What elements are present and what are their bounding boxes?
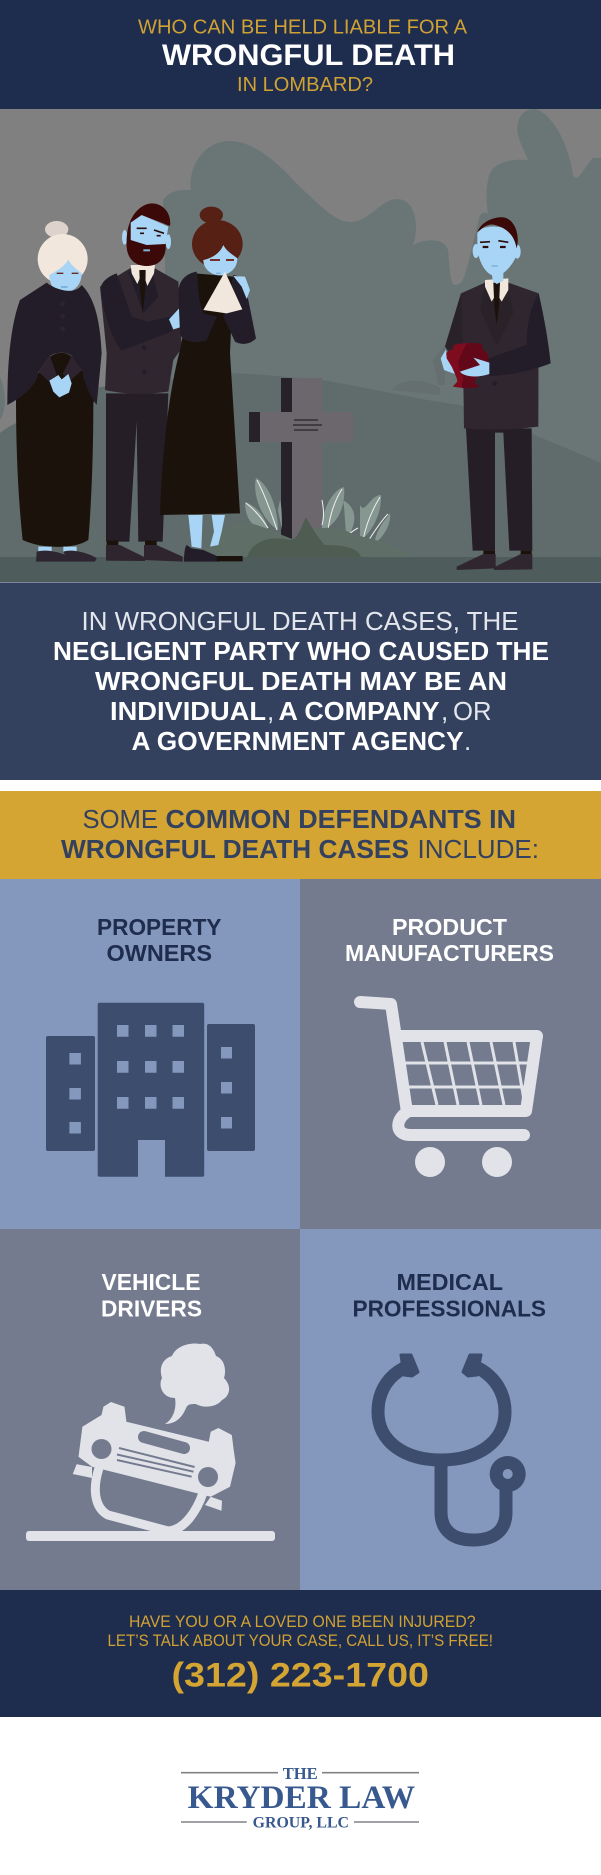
call to action text: HAVE YOU OR A LOVED ONE BEEN INJURED? <box>129 1612 476 1631</box>
panel: call to action <box>0 1590 601 1717</box>
phone number: (312) 223-1700 <box>172 1656 429 1694</box>
figure: man holding urn <box>441 217 551 570</box>
label: MEDICAL <box>396 1269 503 1295</box>
statement text: , <box>267 696 274 726</box>
label: VEHICLE <box>102 1269 200 1295</box>
hill <box>0 373 601 557</box>
illustration: funeral scene <box>0 109 601 583</box>
panel: negligent party statement <box>0 583 601 780</box>
label: DRIVERS <box>101 1296 202 1322</box>
statement text: A GOVERNMENT AGENCY <box>132 726 464 756</box>
title <box>138 16 468 96</box>
panel: vehicle drivers <box>0 1229 300 1590</box>
statement text: , <box>441 696 448 726</box>
label <box>345 914 554 966</box>
statement text: WRONGFUL DEATH MAY BE AN <box>95 666 507 696</box>
statement text: NEGLIGENT PARTY WHO CAUSED THE <box>53 636 549 666</box>
logo: The Kryder Law Group, LLC: THE <box>283 1764 318 1783</box>
label: MANUFACTURERS <box>345 940 554 966</box>
statement text: OR <box>453 696 492 726</box>
icon: overturned car with smoke <box>26 1344 275 1541</box>
icon: buildings <box>46 1003 255 1177</box>
label: OWNERS <box>106 940 212 966</box>
statement text: IN WRONGFUL DEATH CASES, THE <box>82 606 518 636</box>
call to action text <box>108 1612 493 1650</box>
title: WRONGFUL DEATH <box>162 39 455 72</box>
figure: elderly woman <box>7 221 102 562</box>
small mound <box>392 345 445 395</box>
cross gravestone <box>249 378 353 543</box>
panel: common defendants heading <box>0 791 601 879</box>
ground <box>0 557 601 583</box>
label <box>352 1269 546 1322</box>
logo: The Kryder Law Group, LLC: KRYDER LAW <box>188 1780 415 1816</box>
figure: bearded man <box>100 203 183 562</box>
title: WHO CAN BE HELD LIABLE FOR A <box>138 16 468 38</box>
statement text: . <box>464 726 471 756</box>
label: PROFESSIONALS <box>352 1296 546 1322</box>
panel: property owners <box>0 879 300 1229</box>
header panel <box>0 0 601 109</box>
heading text: INCLUDE: <box>418 836 539 864</box>
left edge bush <box>0 377 5 420</box>
icon: shopping cart <box>360 1002 537 1177</box>
heading text: COMMON DEFENDANTS IN <box>166 806 516 834</box>
panel: medical professionals <box>300 1229 601 1590</box>
statement text <box>53 606 549 756</box>
call to action text: LET’S TALK ABOUT YOUR CASE, CALL US, IT’S FREE! <box>108 1631 493 1650</box>
icon: stethoscope <box>378 1355 526 1540</box>
label <box>97 914 222 966</box>
logo: The Kryder Law Group, LLC: GROUP, LLC <box>253 1815 349 1832</box>
plants <box>245 478 390 557</box>
heading text: WRONGFUL DEATH CASES <box>61 836 409 864</box>
label <box>101 1269 202 1322</box>
logo: The Kryder Law Group, LLC <box>181 1764 419 1832</box>
panel: product manufacturers <box>300 879 601 1229</box>
heading text: SOME <box>82 806 158 834</box>
title: IN LOMBARD? <box>237 74 373 96</box>
statement text: INDIVIDUAL <box>110 696 266 726</box>
statement text: A COMPANY <box>278 696 440 726</box>
label: PROPERTY <box>97 914 222 940</box>
label: PRODUCT <box>392 914 507 940</box>
figure: crying woman <box>160 207 256 562</box>
heading text <box>61 806 539 864</box>
background trees <box>163 109 601 463</box>
